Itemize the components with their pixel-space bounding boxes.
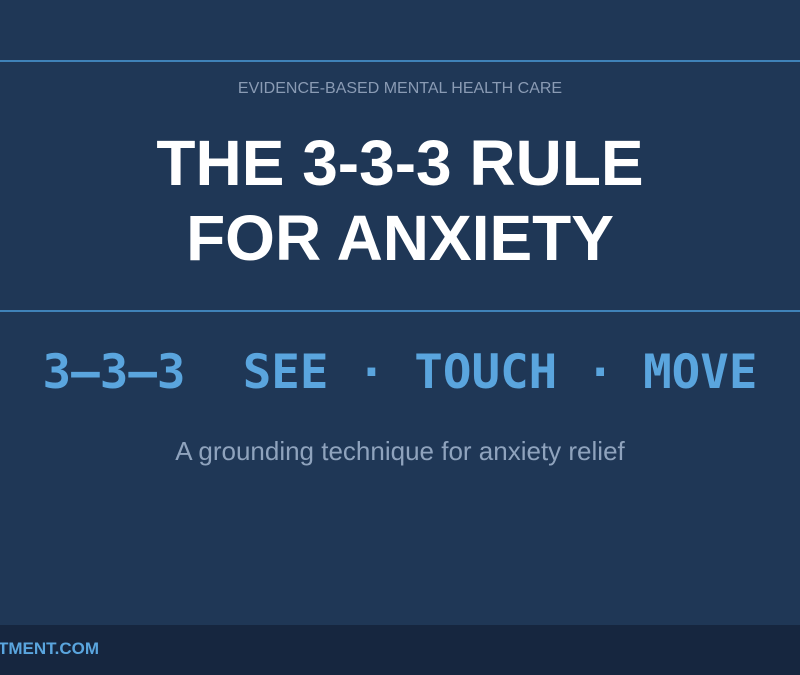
title: THE 3-3-3 RULE (156, 127, 644, 199)
subtitle: A grounding technique for anxiety relief (175, 436, 625, 466)
eyebrow text: EVIDENCE-BASED MENTAL HEALTH CARE (238, 80, 562, 97)
title: FOR ANXIETY (186, 202, 614, 274)
footer bar (0, 625, 800, 675)
footer url: TMENT.COM (0, 639, 99, 658)
title (156, 127, 644, 274)
tagline: 3-3-3 see touch move: 3–3–3 SEE · TOUCH · MOVE (43, 345, 757, 400)
